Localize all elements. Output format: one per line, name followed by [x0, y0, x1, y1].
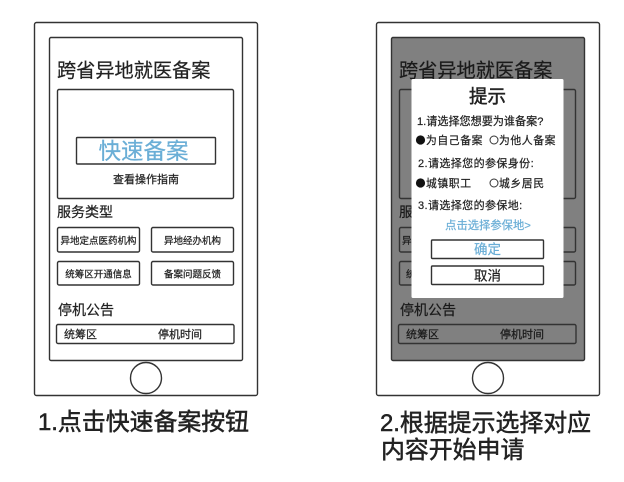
service button: agencies: 异地经办机构	[164, 235, 221, 247]
outage notice table	[56, 324, 234, 344]
phone 1 home button	[130, 362, 162, 394]
question 2: 2.请选择您的参保身份:	[418, 156, 534, 170]
phone 2 dimmed screen: 异	[402, 236, 412, 247]
outage notice table: 停机时间	[158, 327, 202, 341]
confirm button	[432, 240, 544, 258]
service button: feedback: 备案问题反馈	[164, 268, 221, 280]
phone 2 home button	[472, 362, 504, 394]
outage notice table: 统筹区	[64, 327, 97, 341]
phone 1 body	[34, 22, 258, 396]
cancel button: 取消	[474, 268, 501, 284]
phone 2: filing prompt dialog	[376, 22, 600, 396]
prompt dialog	[412, 79, 564, 298]
phone 2 dimmed screen: 跨省异地就医备案	[399, 60, 552, 82]
confirm button: 确定	[474, 242, 501, 257]
phone 1 screen	[50, 38, 242, 360]
quick filing button: 快速备案	[98, 139, 189, 164]
caption step 2: 2.根据提示选择对应	[380, 410, 591, 437]
service button: designated institutions: 异地定点医药机构	[60, 235, 137, 247]
operation guide link: 查看操作指南	[113, 172, 179, 186]
service button: coverage info: 统筹区开通信息	[65, 268, 132, 280]
option: urban-rural resident: 城乡居民	[499, 177, 545, 190]
phone 2 dimmed screen: 停机公告	[400, 302, 456, 318]
service button: designated institutions	[58, 228, 140, 252]
phone 1 title: 跨省异地就医备案	[57, 60, 210, 82]
phone 2 dimmed screen: 统	[406, 268, 416, 280]
question 3: 3.请选择您的参保地:	[418, 198, 523, 212]
panel: quick filing	[58, 90, 234, 198]
cancel button	[432, 266, 544, 284]
phone 1: quick filing screen	[34, 22, 258, 396]
phone 2 dimmed screen: 停机时间	[500, 327, 544, 341]
outage notice heading: 停机公告	[58, 302, 114, 318]
caption step 2	[380, 410, 591, 464]
service types heading: 服务类型	[57, 204, 113, 220]
option: urban employee, selected: 城镇职工	[426, 176, 472, 190]
phone 2 dimmed screen: 统筹区	[406, 327, 439, 341]
caption step 2: 内容开始申请	[381, 437, 524, 464]
dialog title: 提示	[469, 86, 506, 107]
option: for others: 为他人备案	[499, 133, 556, 147]
phone 2 dimmed screen	[392, 38, 584, 360]
caption step 1: 1.点击快速备案按钮	[38, 409, 249, 436]
service button: coverage info	[58, 262, 140, 285]
phone 2 body	[376, 22, 600, 396]
service button: feedback	[152, 262, 234, 285]
option: for self, selected: 为自己备案	[426, 133, 483, 147]
service button: agencies	[152, 228, 234, 252]
question 1: 1.请选择您想要为谁备案?	[417, 114, 543, 128]
insurance location link: 点击选择参保地>	[445, 218, 531, 232]
phone 2 dimmed screen: 服务类型	[399, 204, 455, 220]
quick filing button	[76, 138, 216, 164]
